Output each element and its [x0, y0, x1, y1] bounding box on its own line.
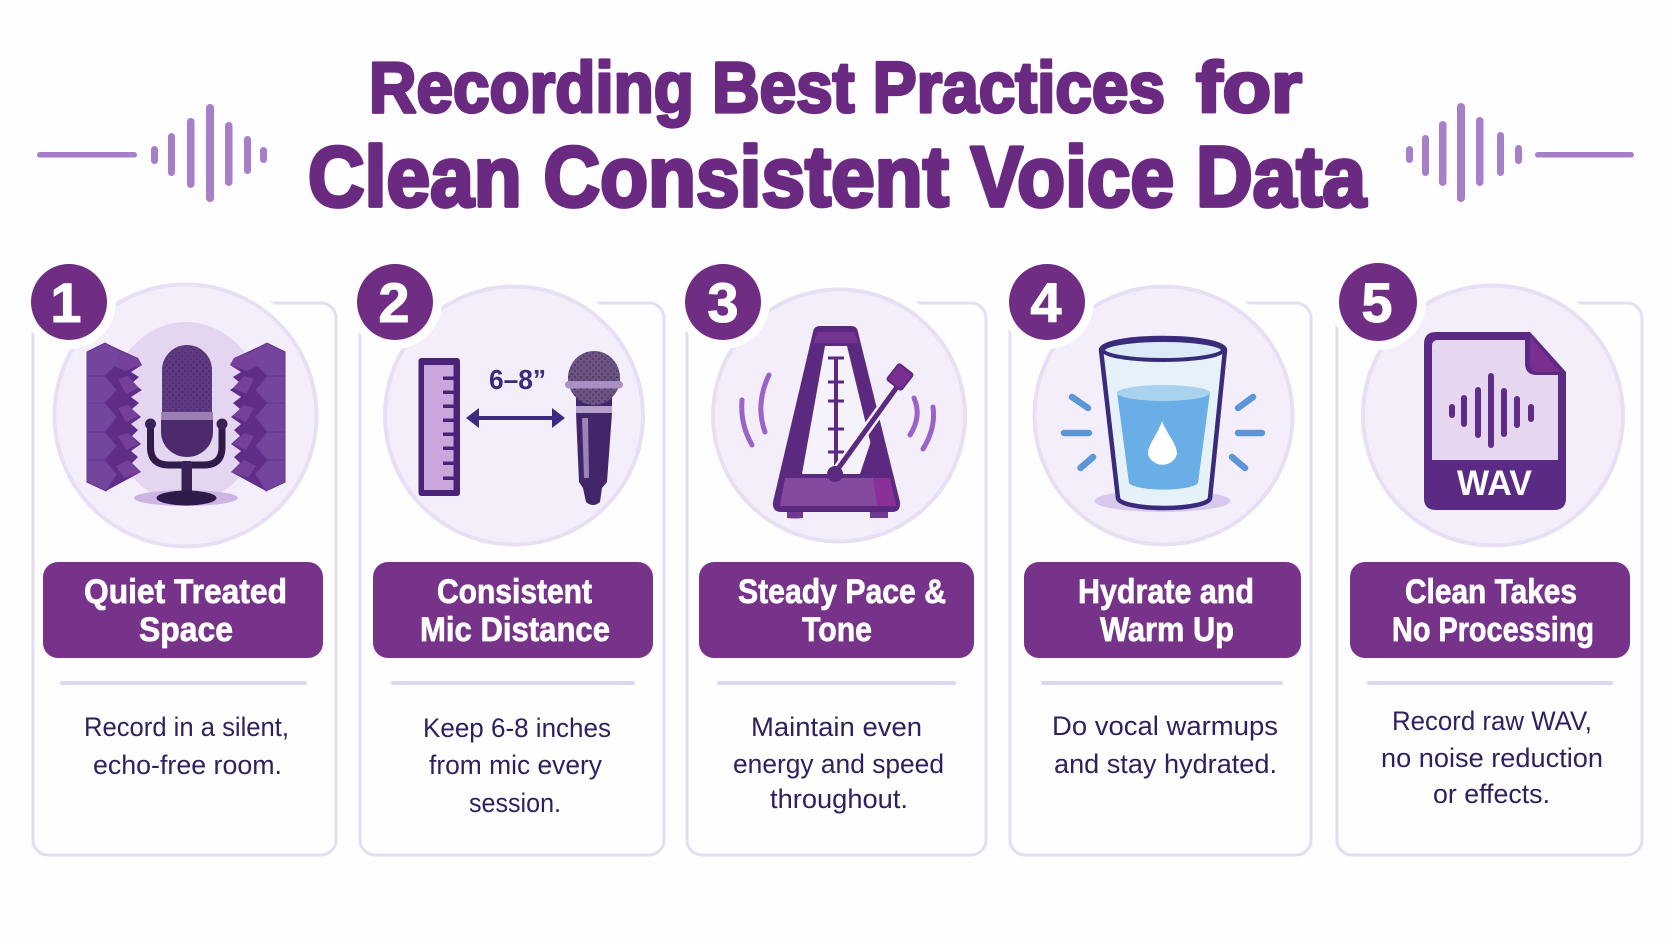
- panel: quiet treated space: [22, 255, 336, 855]
- heading: hydrate and warm up: [1024, 562, 1301, 658]
- panel: steady pace and tone: [676, 255, 986, 855]
- heading: consistent mic distance: Consistent: [437, 573, 592, 611]
- text: quiet treated space description: [84, 712, 289, 780]
- text: mic distance description: from mic every: [429, 750, 602, 780]
- badge: 4: [1009, 264, 1085, 340]
- icon: motion arcs: [742, 375, 934, 449]
- text: clean takes description: Record raw WAV,: [1392, 706, 1592, 736]
- heading: clean takes no processing: Clean Takes: [1405, 573, 1577, 611]
- text: clean takes description: [1381, 706, 1603, 809]
- heading: steady pace and tone: Steady Pace &: [738, 573, 946, 611]
- panel: clean takes no processing: [1330, 254, 1642, 855]
- panel: consistent mic distance: [348, 255, 664, 855]
- label: 6–8 inches: 6–8”: [489, 364, 546, 395]
- heading: quiet treated space: Quiet Treated: [84, 573, 287, 611]
- heading: consistent mic distance: [373, 562, 653, 658]
- icon: ruler: [418, 358, 460, 496]
- heading: hydrate and warm up: Hydrate and: [1078, 573, 1254, 611]
- text: hydration description: [1052, 711, 1278, 779]
- icon: WAV file: [1424, 332, 1566, 510]
- illustration circle: treated space: [54, 284, 316, 546]
- text: steady pace description: energy and speed: [733, 749, 944, 779]
- text: hydration description: and stay hydrated.: [1054, 749, 1277, 779]
- text: mic distance description: session.: [469, 788, 561, 818]
- title: Clean Consistent Voice Data: [308, 130, 1367, 225]
- icon: right sound wave: [1406, 103, 1634, 202]
- badge: 3: 3: [707, 271, 739, 334]
- badge: 1: 1: [50, 271, 82, 334]
- badge: 4: 4: [1030, 271, 1062, 334]
- text: steady pace description: Maintain even: [751, 712, 922, 742]
- illustration circle: mic distance: [385, 286, 643, 544]
- text: clean takes description: no noise reduction: [1381, 743, 1603, 773]
- heading: hydrate and warm up: Warm Up: [1100, 611, 1234, 649]
- heading: clean takes no processing: No Processing: [1392, 611, 1594, 649]
- illustration circle: hydration: [1034, 286, 1292, 544]
- arrow: distance: [466, 408, 565, 428]
- icon: glass of water: [1094, 338, 1230, 512]
- icon: handheld microphone: [565, 351, 623, 505]
- text: steady pace description: throughout.: [770, 784, 908, 814]
- title: [308, 49, 1367, 225]
- badge: 2: 2: [378, 271, 410, 334]
- heading: steady pace and tone: Tone: [802, 611, 872, 649]
- text: quiet treated space description: echo-free room.: [93, 750, 282, 780]
- illustration circle: clean takes: [1363, 286, 1623, 546]
- panel: hydrate and warm up: [1000, 255, 1311, 855]
- heading: quiet treated space: Space: [139, 611, 233, 649]
- icon: metronome: [773, 326, 913, 518]
- badge: 5: [1339, 263, 1417, 341]
- title: for: [1196, 49, 1302, 128]
- heading: clean takes no processing: [1350, 562, 1630, 658]
- badge: 1: [31, 264, 107, 340]
- heading: steady pace and tone: [699, 562, 974, 658]
- text: mic distance description: Keep 6-8 inches: [423, 713, 611, 743]
- illustration circle: steady pace: [713, 290, 965, 542]
- badge: 2: [357, 264, 433, 340]
- heading: consistent mic distance: Mic Distance: [420, 611, 610, 649]
- text: hydration description: Do vocal warmups: [1052, 711, 1278, 741]
- icon: microphone between acoustic foam: [87, 322, 285, 506]
- badge: 3: [685, 264, 761, 340]
- text: steady pace description: [733, 712, 944, 814]
- text: quiet treated space description: Record in a silent,: [84, 712, 289, 742]
- text: mic distance description: [423, 713, 611, 818]
- text: clean takes description: or effects.: [1433, 779, 1550, 809]
- icon: WAV file: WAV: [1457, 464, 1533, 503]
- icon: left sound wave: [37, 104, 267, 202]
- badge: 5: 5: [1361, 271, 1393, 334]
- heading: quiet treated space: [43, 562, 323, 658]
- icon: sparkle ticks: [1064, 397, 1262, 468]
- title: Recording Best Practices: [369, 49, 1165, 128]
